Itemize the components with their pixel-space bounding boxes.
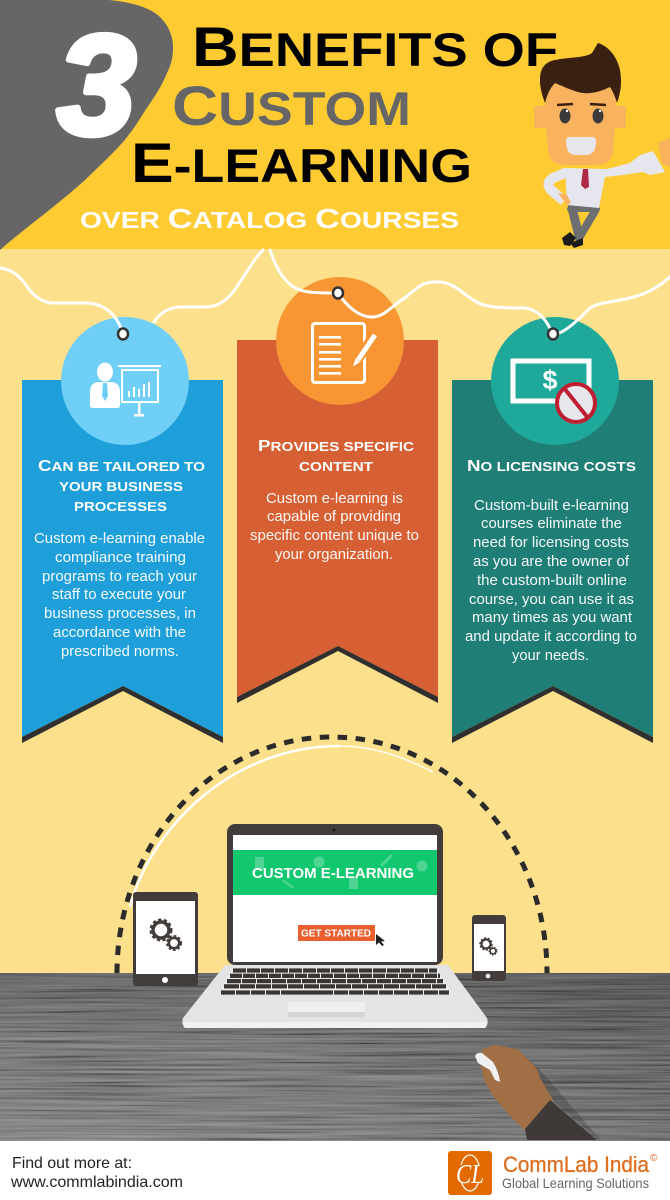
man: mouth <box>566 137 596 155</box>
icon: banknote with prohibition sign: $ <box>542 365 558 395</box>
body text: and update it according to <box>465 629 637 645</box>
hand <box>482 1046 552 1129</box>
ribbon: blue <box>22 380 223 737</box>
icon: presenter and chart board <box>90 362 161 416</box>
logo mark <box>448 1151 492 1195</box>
heading: YOUR BUSINESS <box>59 479 183 494</box>
body text: capable of providing <box>267 509 401 525</box>
body text: compliance training <box>55 550 186 566</box>
body text <box>250 491 419 563</box>
body text: Custom e-learning enable <box>34 531 205 547</box>
ribbon: teal <box>452 380 653 737</box>
cartoon man <box>534 43 670 248</box>
man: hair <box>540 43 621 103</box>
circle badge: orange <box>276 277 404 405</box>
body text: many times as you want <box>472 610 632 626</box>
logo wordmark: © <box>650 1153 658 1164</box>
man: head <box>534 83 626 165</box>
panel: no licensing costs <box>452 317 653 743</box>
arm shadow <box>517 1050 600 1139</box>
logo wordmark <box>502 1152 658 1191</box>
body text: courses eliminate the <box>481 516 622 532</box>
ribbon edge <box>237 646 438 703</box>
body text <box>34 531 205 660</box>
logo mark: CL <box>456 1159 484 1189</box>
man: tie <box>581 169 589 189</box>
sleeve <box>525 1100 597 1140</box>
subtitle: OVER CATALOG COURSES <box>80 203 459 234</box>
get started button: GET STARTED <box>301 928 371 940</box>
grey corner shape <box>0 0 173 250</box>
mouse <box>475 1053 500 1082</box>
body text: the custom-built online <box>477 573 627 589</box>
find out more: Find out more at: <box>12 1155 132 1172</box>
header band <box>0 0 670 250</box>
dashed arc <box>117 737 547 973</box>
panel: specific content <box>237 277 438 703</box>
wooden desk <box>0 973 670 1141</box>
icon: banknote with prohibition sign <box>513 361 595 422</box>
title line: Benefits of: BENEFITS OF <box>192 15 558 78</box>
icon: gears <box>151 920 181 950</box>
body text: staff to execute your <box>52 587 186 603</box>
hand on mouse <box>475 1046 600 1140</box>
body text: accordance with the <box>53 625 186 641</box>
laptop screen <box>233 835 437 962</box>
ribbon edge <box>452 686 653 743</box>
body text: your organization. <box>275 547 393 563</box>
panel: tailored to business processes <box>22 317 223 743</box>
icon: document and pencil <box>312 324 375 382</box>
body text: specific content unique to <box>250 528 419 544</box>
ribbon edge <box>22 686 223 743</box>
green banner <box>233 850 437 895</box>
man: trousers <box>570 208 597 238</box>
man: eyes <box>560 108 604 124</box>
heading: PROVIDES SPECIFIC <box>258 438 415 455</box>
hanging string <box>0 250 670 335</box>
phone <box>472 915 506 981</box>
heading: PROCESSES <box>74 499 167 514</box>
body text: need for licensing costs <box>473 535 629 551</box>
body text: business processes, in <box>44 606 196 622</box>
body text: Custom-built e-learning <box>474 498 629 514</box>
footer <box>0 1141 670 1200</box>
body text: programs to reach your <box>42 569 197 585</box>
laptop base <box>182 965 488 1028</box>
heading <box>258 438 415 474</box>
circle badge: blue <box>61 317 189 445</box>
circle badge: teal <box>491 317 619 445</box>
string holes <box>118 288 558 340</box>
tablet <box>133 892 198 986</box>
logo wordmark: Global Learning Solutions <box>502 1175 649 1191</box>
man: brows <box>557 104 606 105</box>
body text: course, you can use it as <box>469 592 634 608</box>
find out more <box>10 1155 183 1191</box>
body text: Custom e-learning is <box>266 491 403 507</box>
ribbon: orange <box>237 340 438 697</box>
trackpad <box>288 1002 365 1017</box>
icon: gears <box>480 938 497 955</box>
title <box>80 15 558 234</box>
banner title: CUSTOM E-LEARNING <box>252 865 414 882</box>
numeral 3: 3 <box>57 6 136 165</box>
man: hands <box>558 138 670 205</box>
find out more: www.commlabindia.com <box>10 1174 183 1191</box>
heading: NO LICENSING COSTS <box>467 458 636 475</box>
man: shirt <box>565 151 665 208</box>
faint banner icons <box>255 854 428 889</box>
white inner arc <box>130 746 433 907</box>
laptop <box>182 824 488 1028</box>
man: shoes <box>562 232 583 248</box>
cursor <box>376 934 385 946</box>
heading: CONTENT <box>299 459 373 474</box>
heading <box>38 458 205 514</box>
man: left arm <box>548 172 567 201</box>
title line: Custom: CUSTOM <box>172 74 411 137</box>
keyboard <box>219 968 451 995</box>
body text <box>465 498 637 664</box>
heading: CAN BE TAILORED TO <box>38 458 205 475</box>
laptop lid <box>227 824 443 965</box>
logo wordmark: CommLab India <box>503 1152 650 1177</box>
body text: as you are the owner of <box>473 554 629 570</box>
body text: prescribed norms. <box>61 644 179 660</box>
body text: your needs. <box>512 648 589 664</box>
title line: E-learning: E-LEARNING <box>131 131 472 194</box>
